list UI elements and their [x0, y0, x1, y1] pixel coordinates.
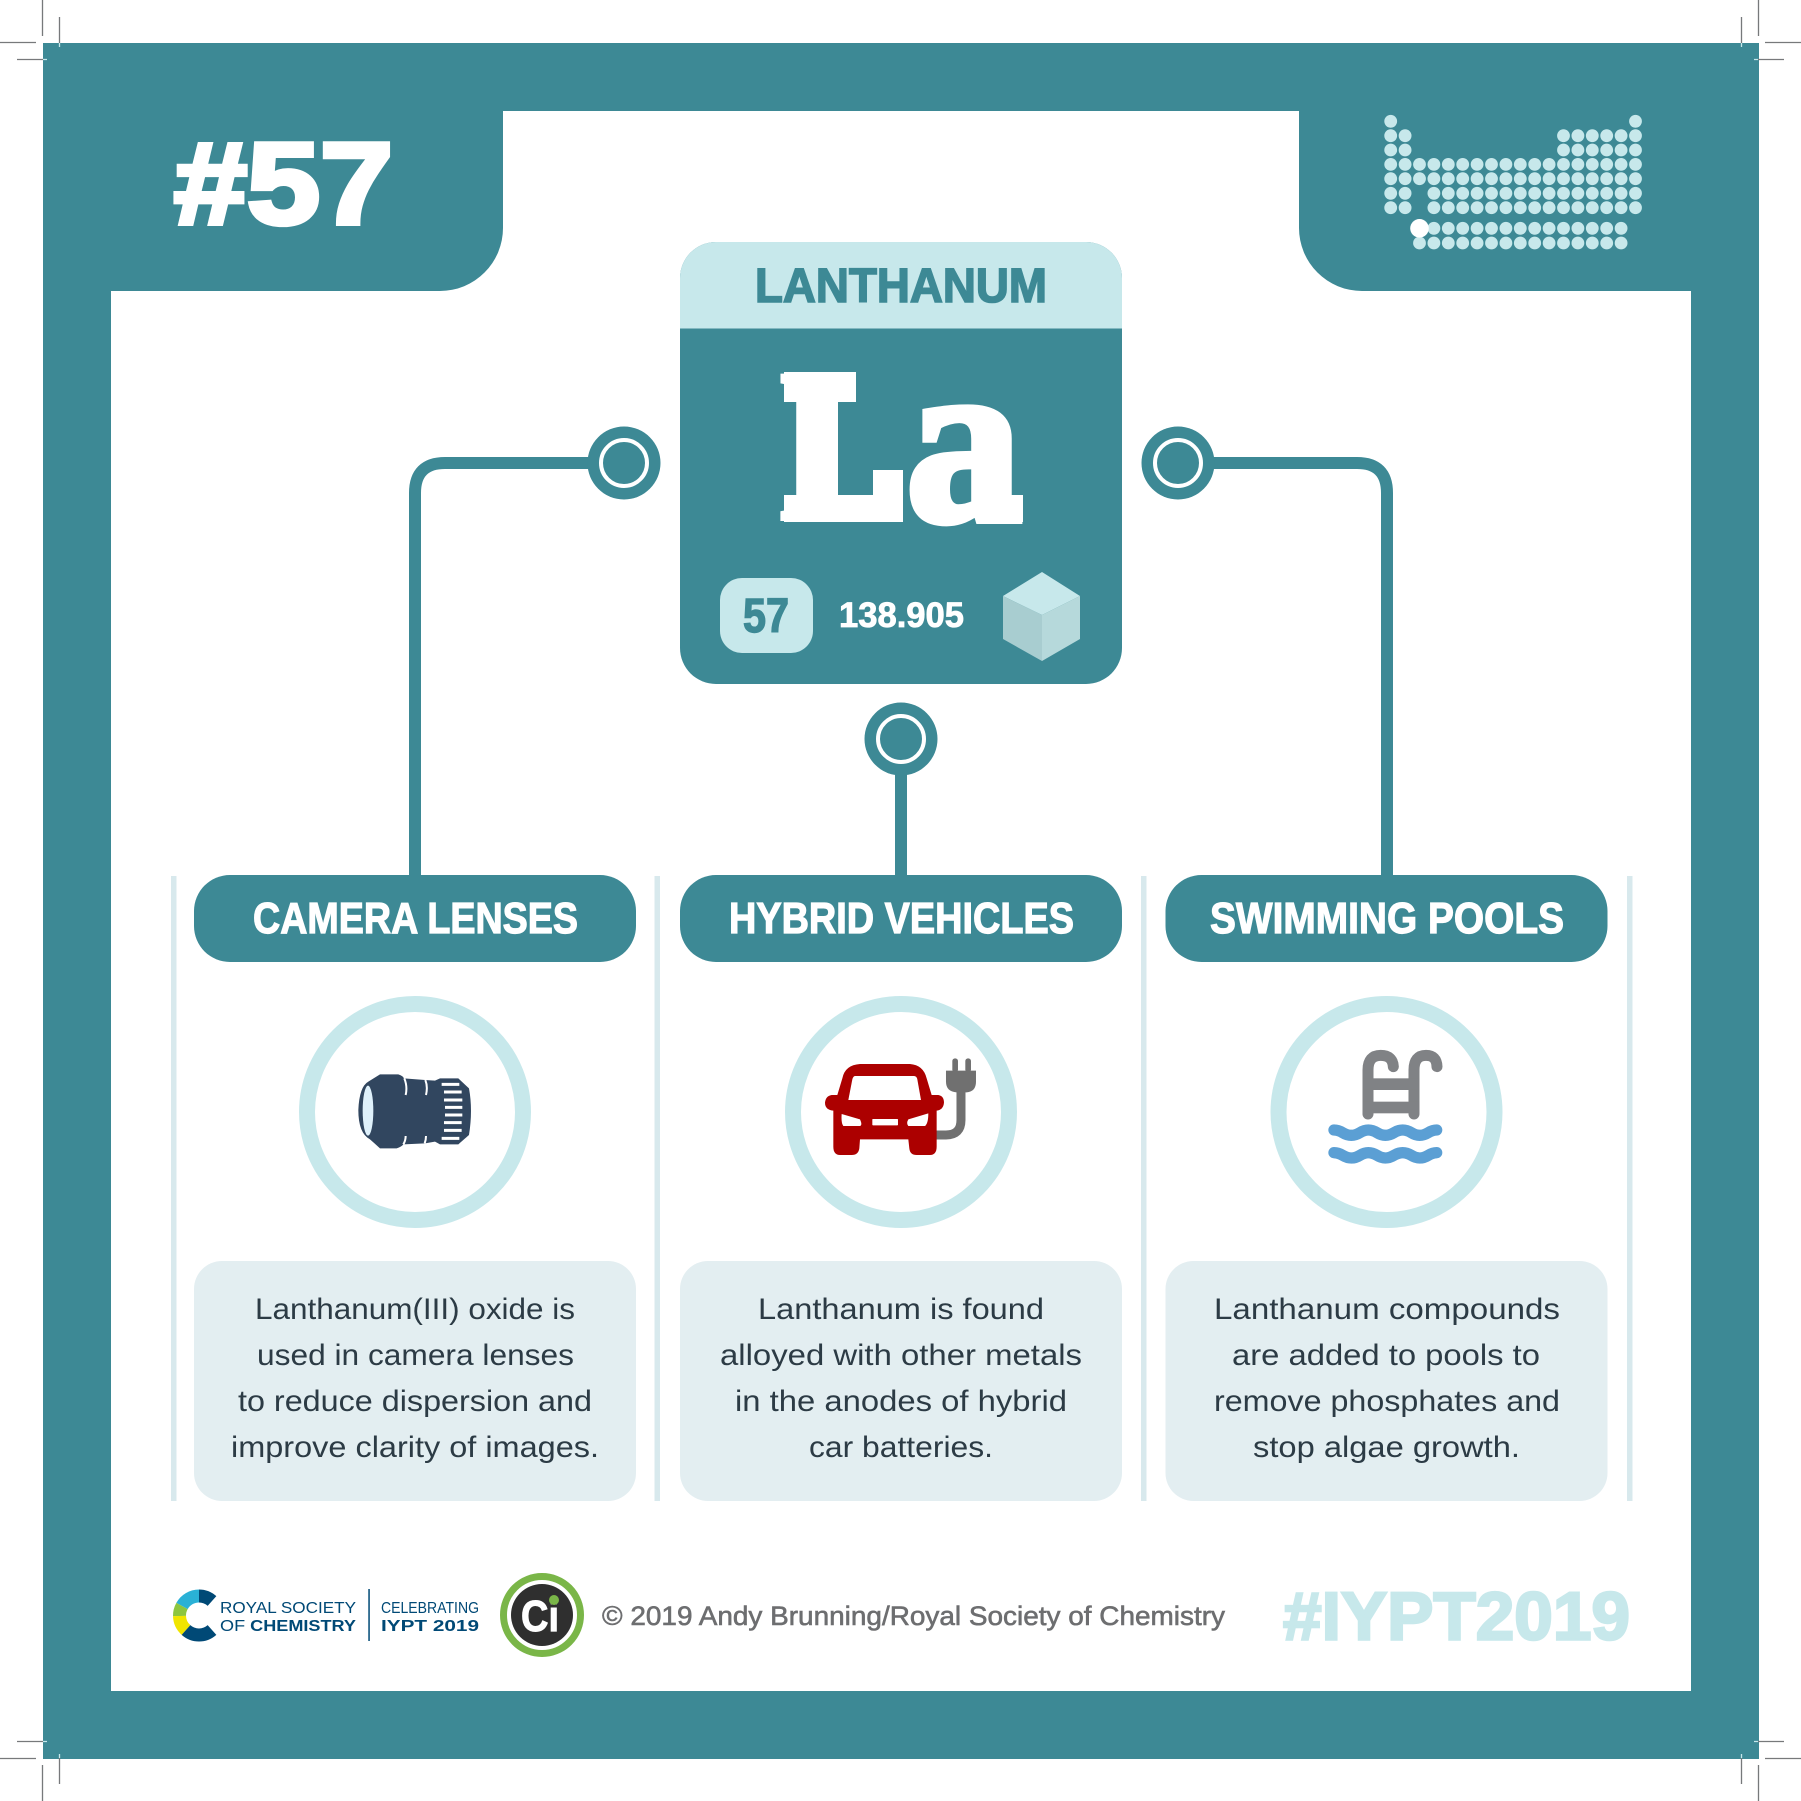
footer logo: Compound Interest	[504, 1576, 580, 1654]
description box: camera lenses	[194, 1261, 636, 1501]
atomic number badge: 57	[743, 590, 789, 643]
heading pill: swimming pools	[1166, 875, 1608, 962]
icon: RSC ring	[179, 1596, 212, 1635]
footer logo: Royal Society of Chemistry: ROYAL SOCIETY	[220, 1600, 356, 1617]
icon: periodic table of dots	[1391, 121, 1636, 243]
heading pill: hybrid vehicles	[680, 875, 1122, 962]
footer logo: Compound Interest: Ci	[521, 1592, 559, 1641]
connector: left	[415, 426, 660, 880]
atomic number badge	[720, 578, 813, 653]
description box: hybrid vehicles: alloyed with other metals	[720, 1339, 1082, 1372]
description box: hybrid vehicles: Lanthanum is found	[758, 1293, 1044, 1326]
icon: camera lens	[358, 1074, 471, 1148]
element name: LANTHANUM	[755, 260, 1047, 313]
description box: swimming pools: are added to pools to	[1232, 1339, 1540, 1372]
connector: right	[1142, 426, 1387, 880]
element symbol	[778, 309, 1023, 572]
description box: camera lenses: to reduce dispersion and	[238, 1385, 592, 1418]
icon ring: camera lens	[307, 1004, 523, 1220]
panel: element card	[680, 242, 1122, 684]
element symbol: a	[906, 309, 1022, 572]
heading pill: camera lenses	[194, 875, 636, 962]
title: element number: #57	[174, 118, 393, 248]
icon ring: swimming pool	[1278, 1004, 1494, 1220]
footer logo: Royal Society of Chemistry: CELEBRATING	[381, 1600, 479, 1617]
footer logo: Royal Society of Chemistry	[179, 1589, 479, 1641]
atomic mass: 138.905	[839, 596, 964, 635]
copyright: © 2019 Andy Brunning/Royal Society of Chemistry	[602, 1601, 1226, 1631]
description box: swimming pools: stop algae growth.	[1253, 1431, 1520, 1464]
description box: hybrid vehicles: car batteries.	[809, 1431, 993, 1464]
dividers	[171, 876, 1632, 1501]
icon ring: hybrid car	[793, 1004, 1009, 1220]
icon: hybrid car with plug	[825, 1058, 976, 1155]
hashtag: #IYPT2019	[1283, 1578, 1630, 1654]
element symbol: L	[778, 323, 904, 569]
footer logo: Royal Society of Chemistry: OF CHEMISTRY	[220, 1618, 357, 1635]
heading pill: hybrid vehicles: HYBRID VEHICLES	[729, 894, 1074, 943]
description box: swimming pools	[1166, 1261, 1608, 1501]
description box: hybrid vehicles: in the anodes of hybrid	[735, 1385, 1067, 1418]
description box: swimming pools: Lanthanum compounds	[1214, 1293, 1560, 1326]
description box: camera lenses: Lanthanum(III) oxide is	[255, 1293, 575, 1326]
footer logo: Royal Society of Chemistry: IYPT 2019	[381, 1618, 479, 1635]
panel: swimming pools	[1166, 875, 1608, 1501]
heading pill: swimming pools: SWIMMING POOLS	[1210, 894, 1564, 943]
panel: camera lenses	[194, 875, 636, 1501]
connector: centre	[864, 702, 938, 880]
description box: camera lenses: used in camera lenses	[257, 1339, 574, 1372]
panel: hybrid vehicles	[680, 875, 1122, 1501]
description box: camera lenses: improve clarity of images.	[231, 1431, 599, 1464]
icon: pool ladder and water	[1334, 1055, 1437, 1158]
heading pill: camera lenses: CAMERA LENSES	[253, 894, 578, 943]
description box: hybrid vehicles	[680, 1261, 1122, 1501]
description box: swimming pools: remove phosphates and	[1214, 1385, 1560, 1418]
icon: crystal cube	[1003, 572, 1080, 661]
